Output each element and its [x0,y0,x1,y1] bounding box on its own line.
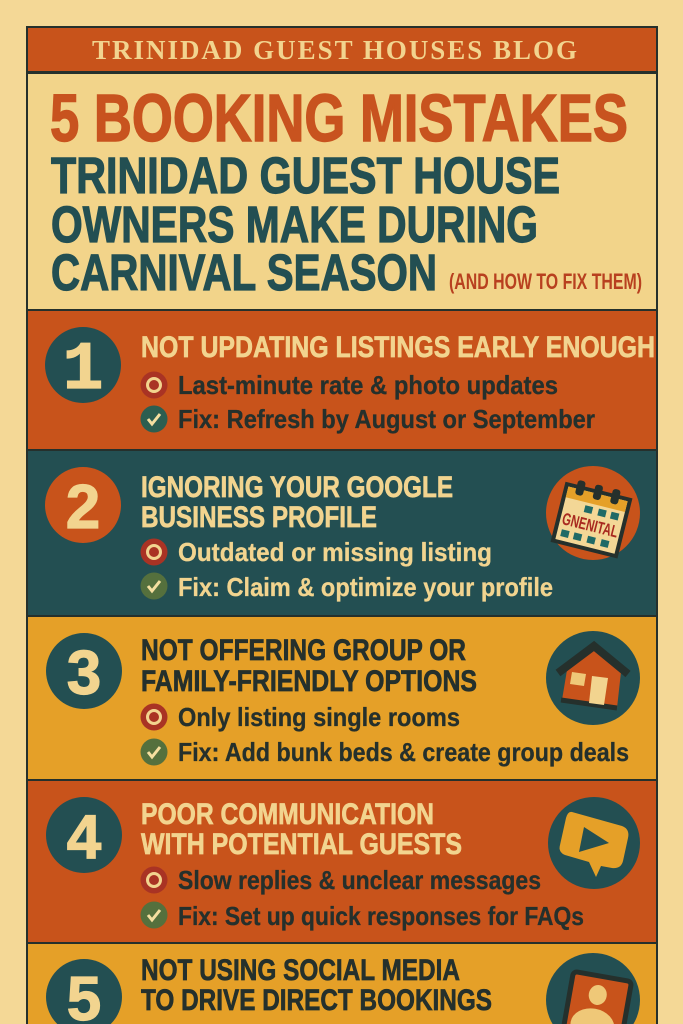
panel 5: social media [27,943,657,1024]
icon: calendar: GNENITAL [560,509,620,542]
icon: house [546,631,640,725]
heading 2: BUSINESS PROFILE [141,501,377,534]
title lines in teal: CARNIVAL SEASON [51,244,437,301]
number 1 [45,327,121,409]
icon: calendar [546,466,640,560]
number 2 [45,467,121,543]
heading 2 [141,471,453,534]
heading 3: NOT OFFERING GROUP OR [141,634,466,667]
heading 4 [141,798,462,861]
heading 2: IGNORING YOUR GOOGLE [141,471,453,504]
number 2: 2 [66,473,100,542]
title lines in teal: TRINIDAD GUEST HOUSE [51,147,560,204]
number 3: 3 [67,639,101,708]
fix 4: Fix: Set up quick responses for FAQs [178,901,584,931]
blog name: TRINIDAD GUEST HOUSES BLOG [92,35,579,65]
header band [27,27,657,72]
heading 3 [141,634,477,698]
number 1: 1 [63,332,103,409]
fix 1: Fix: Refresh by August or September [178,404,595,434]
number 4 [46,797,122,873]
title lines in teal [51,147,560,301]
title panel [27,73,657,310]
heading 5: TO DRIVE DIRECT BOOKINGS [141,984,492,1017]
icon: profile photo [546,953,640,1024]
mistake 4: Slow replies & unclear messages [178,865,541,895]
fix 3: Fix: Add bunk beds & create group deals [178,737,629,767]
mistake 1: Last-minute rate & photo updates [178,370,558,400]
heading 4: WITH POTENTIAL GUESTS [141,828,462,861]
heading 3: FAMILY-FRIENDLY OPTIONS [141,665,477,698]
title lines in teal: OWNERS MAKE DURING [51,196,538,253]
heading 5 [141,954,492,1017]
panel 1: listings [27,310,657,450]
number 5 [46,959,122,1024]
number 3 [46,633,122,709]
number 4: 4 [67,803,102,872]
icon: video bubble [548,797,640,889]
panel 3: group options [27,616,657,780]
fix 2: Fix: Claim & optimize your profile [178,572,553,602]
mistake 3: Only listing single rooms [178,702,460,732]
panel 4: communication [27,780,657,943]
panel 2: google profile [27,450,657,616]
heading 5: NOT USING SOCIAL MEDIA [141,954,460,987]
heading 4: POOR COMMUNICATION [141,798,434,831]
mistake 2: Outdated or missing listing [178,537,492,567]
